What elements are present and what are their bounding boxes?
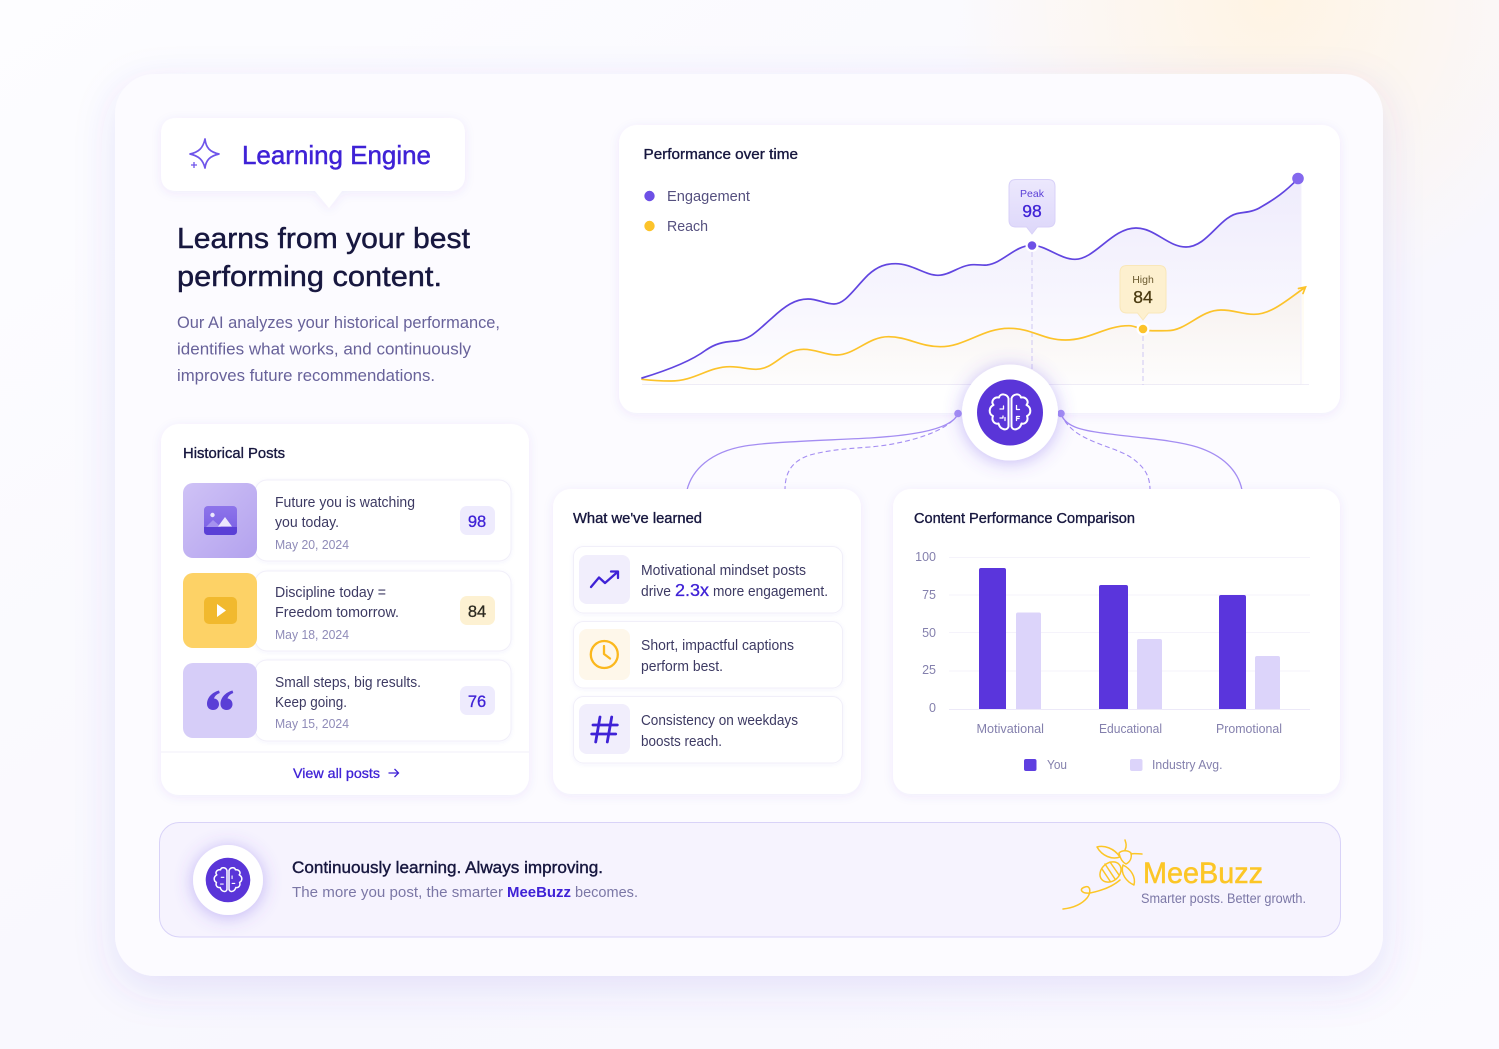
icon: clock <box>591 641 618 668</box>
post row 1: May 20, 2024 <box>275 538 349 552</box>
panel: content performance comparison <box>893 489 1340 794</box>
post row 1: Future you is watching <box>275 495 415 511</box>
bar chart: Educational <box>1099 722 1162 736</box>
legend: Reach <box>667 219 708 235</box>
post row 3: 76 <box>468 693 486 711</box>
icon: bee <box>1063 840 1142 909</box>
post row 1: 98 <box>468 513 486 531</box>
logo: MeeBuzz <box>1063 840 1306 909</box>
line chart <box>642 173 1309 385</box>
panel heading: Performance over time <box>644 147 798 163</box>
logo: MeeBuzz: Smarter posts. Better growth. <box>1141 891 1306 906</box>
brain node <box>954 364 1065 460</box>
post row 3: Keep going. <box>275 695 347 711</box>
connector lines from brain node to lower panels <box>687 414 1242 490</box>
main card <box>115 74 1383 976</box>
intro paragraph <box>177 314 500 385</box>
chart legend: Industry Avg. <box>1152 758 1222 772</box>
bar chart: Promotional <box>1216 722 1282 736</box>
callout: high 84: 84 <box>1133 287 1153 307</box>
callout: peak 98: Peak <box>1020 188 1045 200</box>
insight 1 <box>574 546 842 613</box>
insight 2: perform best. <box>641 659 723 675</box>
insight 2 <box>574 622 842 688</box>
insight 1: Motivational mindset posts <box>641 563 806 579</box>
link: view all posts: View all posts <box>293 765 380 781</box>
bar chart: Motivational <box>976 722 1044 736</box>
insight 1: 2.3x <box>675 580 709 600</box>
bar chart: 50 <box>922 626 936 640</box>
bar chart <box>915 550 1310 736</box>
legend <box>644 189 750 235</box>
post row 2: Freedom tomorrow. <box>275 605 399 621</box>
icon: brain badge <box>193 845 263 915</box>
insight 1: more engagement. <box>713 584 828 600</box>
post row 3: Small steps, big results. <box>275 675 421 691</box>
chart legend <box>1024 758 1222 772</box>
callout: Learning Engine <box>161 118 465 208</box>
banner: continuously learning <box>160 822 1340 937</box>
heading: performing content. <box>177 261 442 293</box>
panel heading: Historical Posts <box>183 446 285 462</box>
icon: play <box>204 597 237 624</box>
icon: trend up <box>591 572 618 587</box>
heading <box>177 223 470 293</box>
panel: what we've learned <box>553 489 861 794</box>
engagement line <box>642 179 1298 378</box>
icon: quote <box>207 690 233 710</box>
bar chart: 100 <box>915 550 936 564</box>
post row 1: you today. <box>275 515 339 531</box>
panel heading: What we've learned <box>573 511 702 527</box>
icon: brain <box>990 394 1030 429</box>
post row 1 <box>183 480 511 561</box>
heading: Learns from your best <box>177 223 470 255</box>
callout: high 84: High <box>1132 274 1154 286</box>
post row 2: 84 <box>468 603 486 621</box>
insight 2: Short, impactful captions <box>641 638 794 654</box>
legend: Engagement <box>667 189 750 205</box>
panel: historical posts <box>161 424 529 795</box>
banner heading: Continuously learning. Always improving. <box>292 858 603 877</box>
intro paragraph: improves future recommendations. <box>177 367 435 385</box>
banner text: becomes. <box>575 884 638 901</box>
insight 3 <box>574 696 842 763</box>
intro paragraph: identifies what works, and continuously <box>177 340 472 358</box>
reach line <box>642 287 1306 381</box>
post row 2: May 18, 2024 <box>275 628 349 642</box>
callout: peak 98: 98 <box>1022 201 1042 221</box>
banner text: The more you post, the smarter <box>292 884 503 901</box>
bar chart: 0 <box>929 701 936 715</box>
post row 2 <box>183 571 511 651</box>
intro paragraph: Our AI analyzes your historical performance, <box>177 314 500 332</box>
insight 3: boosts reach. <box>641 734 722 750</box>
callout: high 84 <box>1120 266 1166 320</box>
callout title: Learning Engine <box>242 140 431 170</box>
banner text: MeeBuzz <box>507 884 571 901</box>
icon: hashtag <box>592 717 617 742</box>
insight 3: Consistency on weekdays <box>641 713 798 729</box>
bar chart: 75 <box>922 588 936 602</box>
post row 3: May 15, 2024 <box>275 717 349 731</box>
icon: image <box>204 506 237 535</box>
logo: MeeBuzz: MeeBuzz <box>1143 857 1263 890</box>
insight 1: drive <box>641 584 671 600</box>
callout: peak 98 <box>1009 180 1055 234</box>
chart legend: You <box>1047 758 1067 772</box>
icon: sparkle <box>190 139 219 168</box>
post row 3 <box>183 660 511 741</box>
post row 2: Discipline today = <box>275 585 386 601</box>
bar chart: 25 <box>922 663 936 677</box>
banner text <box>292 884 638 901</box>
panel: performance over time <box>619 125 1340 413</box>
panel heading: Content Performance Comparison <box>914 511 1135 527</box>
